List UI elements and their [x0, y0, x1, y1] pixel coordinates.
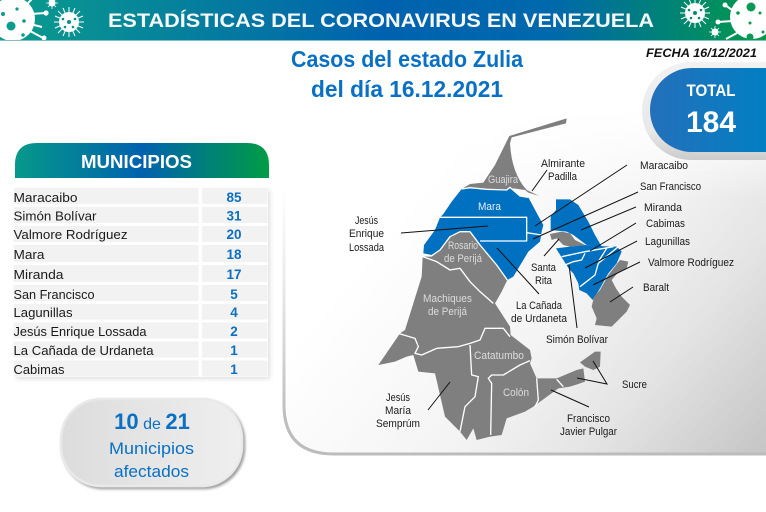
- label: Almirante Padilla: [541, 158, 585, 183]
- map labels: [349, 158, 734, 438]
- date label: FECHA 16/12/2021: [646, 48, 757, 60]
- row: Maracaibo: 85: [226, 190, 242, 205]
- icon: large virus right: [716, 0, 766, 40]
- region: Santa Rita: [550, 232, 585, 247]
- row: Valmore Rodríguez: 20: [226, 227, 242, 242]
- row: Valmore Rodríguez: Valmore Rodríguez: [14, 227, 127, 242]
- main heading: del día 16.12.2021: [311, 76, 503, 102]
- region: Cabimas, Lagunillas and Valmore Rodríguez: [556, 245, 622, 300]
- total callout: [642, 62, 766, 160]
- inner label: Machiques de Perijá: Machiques: [423, 293, 472, 305]
- affected municipalities callout: Municipios: [109, 439, 194, 458]
- map panel background: [280, 108, 766, 454]
- label: Almirante Padilla: Padilla: [548, 171, 578, 183]
- inner label: Rosario de Perijá: Rosario: [448, 240, 478, 252]
- label: Maracaibo: Maracaibo: [640, 160, 688, 172]
- inner label: Colón: Colón: [503, 387, 529, 399]
- region: Baralt: [592, 260, 630, 327]
- row: Lagunillas: Lagunillas: [14, 305, 73, 320]
- map of Zulia: [378, 118, 630, 440]
- label: Francisco Javier Pulgar: [560, 413, 617, 438]
- label: Francisco Javier Pulgar: Javier Pulgar: [560, 426, 617, 438]
- inner label: Machiques de Perijá: [423, 293, 472, 318]
- label: Sucre: Sucre: [622, 379, 647, 391]
- label: Baralt: Baralt: [643, 282, 669, 294]
- row: La Cañada de Urdaneta: 1: [230, 343, 238, 358]
- inner label: Rosario de Perijá: [444, 240, 483, 265]
- label: Almirante Padilla: Almirante: [541, 158, 585, 170]
- label: Cabimas: Cabimas: [646, 218, 685, 230]
- label: Jesús María Semprúm: [376, 392, 420, 430]
- row: Cabimas: Cabimas: [14, 362, 65, 377]
- row: San Francisco: 5: [230, 287, 238, 302]
- label: La Cañada de Urdaneta: de Urdaneta: [511, 313, 568, 325]
- row: Jesús Enrique Lossada: Jesús Enrique Lossada: [14, 324, 147, 339]
- row: Jesús Enrique Lossada: [14, 322, 268, 339]
- label: Santa Rita: [531, 262, 557, 287]
- region: Sucre north: [580, 352, 601, 370]
- main heading: Casos del estado Zulia: [291, 46, 523, 72]
- row: Miranda: Miranda: [14, 267, 64, 282]
- icon: medium virus left: [54, 7, 84, 37]
- header title: ESTADÍSTICAS DEL CORONAVIRUS EN VENEZUELA: [108, 9, 654, 32]
- label: Jesús María Semprúm: Jesús: [386, 392, 410, 404]
- icon: viruses left and right: [0, 0, 766, 44]
- icon: large virus left: [0, 0, 49, 44]
- row: Simón Bolívar: Simón Bolívar: [14, 208, 97, 224]
- row: Mara: Mara: [14, 247, 45, 262]
- row: Lagunillas: [14, 304, 268, 320]
- header banner: [0, 0, 766, 44]
- label: Jesús María Semprúm: Semprúm: [376, 418, 420, 430]
- row: Valmore Rodríguez: [14, 226, 268, 242]
- row: La Cañada de Urdaneta: La Cañada de Urdaneta: [14, 343, 154, 358]
- label: Santa Rita: Rita: [535, 275, 553, 287]
- main heading: [291, 46, 523, 102]
- total callout: 184: [686, 106, 736, 139]
- icon: medium virus right: [680, 0, 710, 28]
- label: Jesús Enrique Lossada: Enrique: [349, 228, 384, 240]
- map leader lines: [401, 165, 640, 410]
- label: Jesús Enrique Lossada: Jesús: [355, 215, 378, 227]
- affected municipalities callout: [61, 399, 242, 486]
- municipios heading: MUNICIPIOS: [81, 152, 192, 172]
- region: Mara internal borders: [440, 187, 542, 241]
- affected municipalities callout: 10 de 21: [114, 409, 190, 434]
- label: Francisco Javier Pulgar: Francisco: [567, 413, 610, 425]
- label: La Cañada de Urdaneta: [511, 300, 568, 325]
- row: Cabimas: [14, 360, 268, 377]
- row: San Francisco: San Francisco: [14, 287, 94, 302]
- row: Simón Bolívar: 31: [226, 208, 242, 224]
- region: eastern coast borders: [562, 247, 618, 287]
- label: Jesús Enrique Lossada: Lossada: [349, 242, 385, 254]
- row: Miranda: 17: [226, 267, 242, 282]
- inner label: Machiques de Perijá: de Perijá: [428, 306, 468, 318]
- label: Miranda: Miranda: [644, 202, 683, 214]
- row: Maracaibo: Maracaibo: [14, 190, 78, 205]
- row: Maracaibo: [14, 188, 268, 205]
- label: Valmore Rodríguez: Valmore Rodríguez: [648, 257, 734, 269]
- row: Lagunillas: 4: [230, 305, 238, 320]
- region: Mara and Jesús Enrique Lossada: [423, 187, 543, 280]
- icon: small virus right: [709, 26, 721, 38]
- region: Miranda: [551, 199, 602, 247]
- row: Mara: 18: [226, 247, 242, 262]
- region: southern municipalities: [378, 232, 585, 440]
- label: Simón Bolívar: Simón Bolívar: [546, 334, 608, 346]
- row: Miranda: [14, 265, 268, 282]
- municipios heading: [15, 143, 269, 178]
- row: La Cañada de Urdaneta: [14, 342, 268, 358]
- inner label: Guajira: Guajira: [488, 174, 519, 186]
- inner label: Mara: Mara: [478, 201, 502, 213]
- affected municipalities callout: afectados: [114, 462, 189, 481]
- icon: small virus left: [46, 0, 58, 9]
- label: Jesús Enrique Lossada: [349, 215, 385, 254]
- label: Santa Rita: Santa: [531, 262, 557, 274]
- region: southern borders: [398, 232, 563, 435]
- row: Jesús Enrique Lossada: 2: [230, 324, 238, 339]
- label: Lagunillas: Lagunillas: [645, 236, 690, 248]
- row: Mara: [14, 245, 268, 262]
- label: San Francisco: San Francisco: [640, 181, 701, 193]
- total callout: TOTAL: [686, 82, 736, 100]
- row: Cabimas: 1: [230, 362, 238, 377]
- row: San Francisco: [14, 285, 268, 302]
- inner label: Rosario de Perijá: de Perijá: [444, 253, 483, 265]
- municipios table: [14, 188, 268, 377]
- label: La Cañada de Urdaneta: La Cañada: [516, 300, 563, 312]
- row: Simón Bolívar: [14, 207, 268, 224]
- inner label: Catatumbo: Catatumbo: [474, 350, 524, 362]
- region: Guajira and Almirante Padilla: [462, 118, 567, 196]
- label: Jesús María Semprúm: María: [385, 405, 412, 417]
